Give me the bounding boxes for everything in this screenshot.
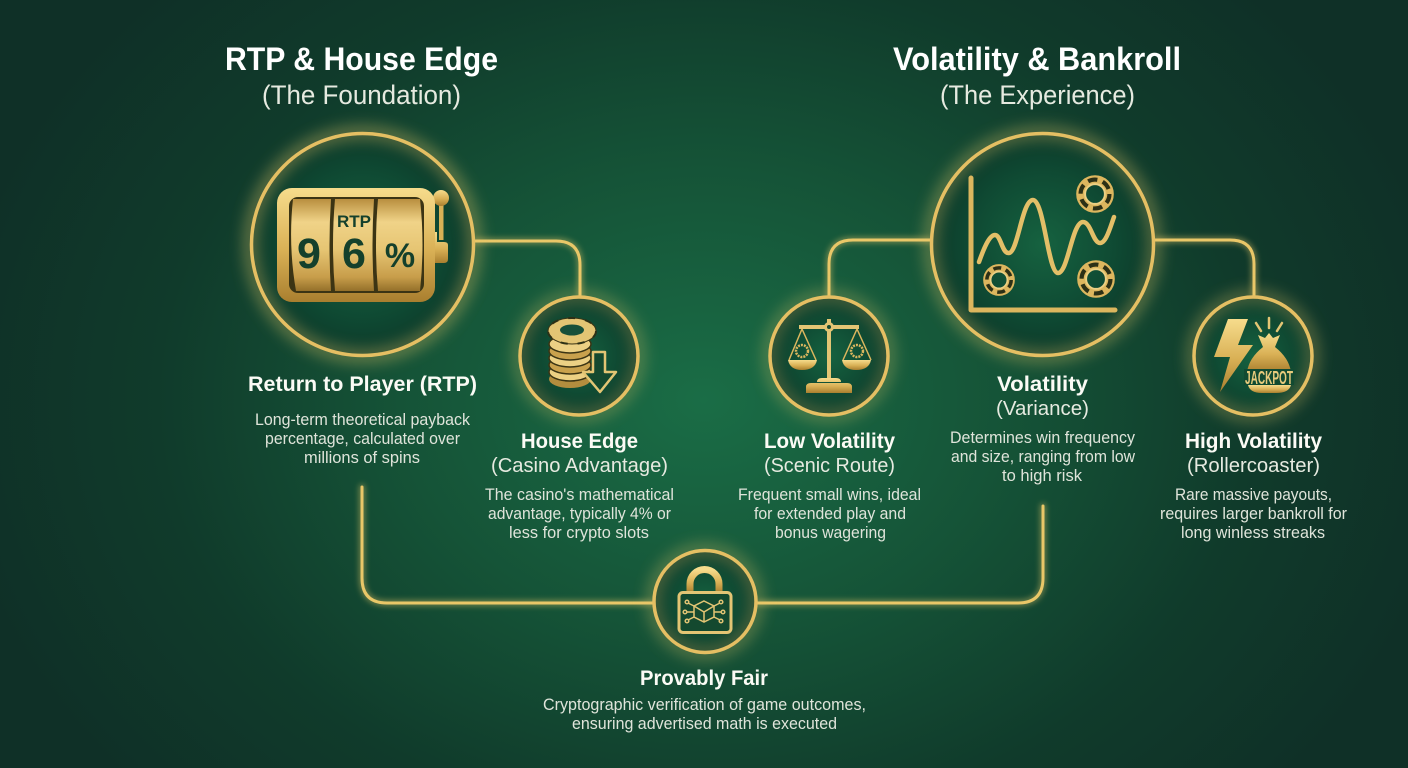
text block: House Edge: House Edge [521,429,638,453]
icon: high volatility bolt and jackpot bag: JACKPOT [1245,368,1293,388]
text block: Return to Player [248,372,477,467]
heading: Volatility and Bankroll: Volatility & Bankroll [893,41,1181,77]
text block: House Edge: less for crypto slots [509,524,649,542]
icon: provably fair padlock [653,550,757,654]
text block: Volatility: Determines win frequency [950,429,1136,447]
heading: RTP and House Edge [225,41,498,110]
text block: High Volatility: long winless streaks [1181,524,1325,542]
heading: Volatility and Bankroll: (The Experience) [940,80,1135,110]
icon: RTP slot machine: % [385,237,415,275]
text block: House Edge: (Casino Advantage) [491,454,668,477]
icon: RTP slot machine: 9 [297,230,321,278]
text block: Provably Fair: ensuring advertised math is executed [572,715,837,733]
connector lines [362,240,1254,603]
text block: Volatility: (Variance) [996,397,1089,420]
text block: Low Volatility: bonus wagering [775,524,886,542]
text block: Provably Fair: Cryptographic verification of game outcomes, [543,696,866,714]
text block: Provably Fair [543,666,866,733]
text block: House Edge: advantage, typically 4% or [488,505,671,523]
text block: High Volatility: Rare massive payouts, [1175,486,1332,504]
text block: Return to Player: millions of spins [304,449,420,467]
icon: house edge chip stack [519,296,639,416]
text block: Volatility [950,372,1136,485]
icon: RTP slot machine [250,132,474,356]
text block: Low Volatility: Low Volatility [764,429,895,453]
text block: High Volatility: High Volatility [1185,429,1322,453]
text block: Return to Player: Long-term theoretical payback [255,411,471,429]
heading: RTP and House Edge: RTP & House Edge [225,41,498,77]
text block: Volatility: to high risk [1002,467,1083,485]
heading: RTP and House Edge: (The Foundation) [262,80,461,110]
text block: House Edge [485,429,674,542]
text block: Low Volatility: Frequent small wins, ideal [738,486,921,504]
text block: Return to Player: percentage, calculated over [265,430,460,448]
text block: Low Volatility [738,429,921,542]
text block: Low Volatility: (Scenic Route) [764,454,895,477]
icon: RTP slot machine: RTP [337,212,371,231]
text block: Low Volatility: for extended play and [754,505,906,523]
icon: volatility chart with chips [930,132,1154,356]
text block: Volatility: Volatility [997,372,1088,396]
icon: RTP slot machine: 6 [342,230,366,278]
text block: Volatility: and size, ranging from low [951,448,1135,466]
icon: low volatility balance scale [769,296,889,416]
text block: House Edge: The casino's mathematical [485,486,674,504]
text block: High Volatility [1160,429,1347,542]
icon: high volatility bolt and jackpot bag [1193,296,1313,416]
text block: Provably Fair: Provably Fair [640,666,769,690]
text block: High Volatility: (Rollercoaster) [1187,454,1320,477]
text block: Return to Player: Return to Player (RTP) [248,372,477,396]
text block: High Volatility: requires larger bankroll for [1160,505,1347,523]
heading: Volatility and Bankroll [893,41,1181,110]
